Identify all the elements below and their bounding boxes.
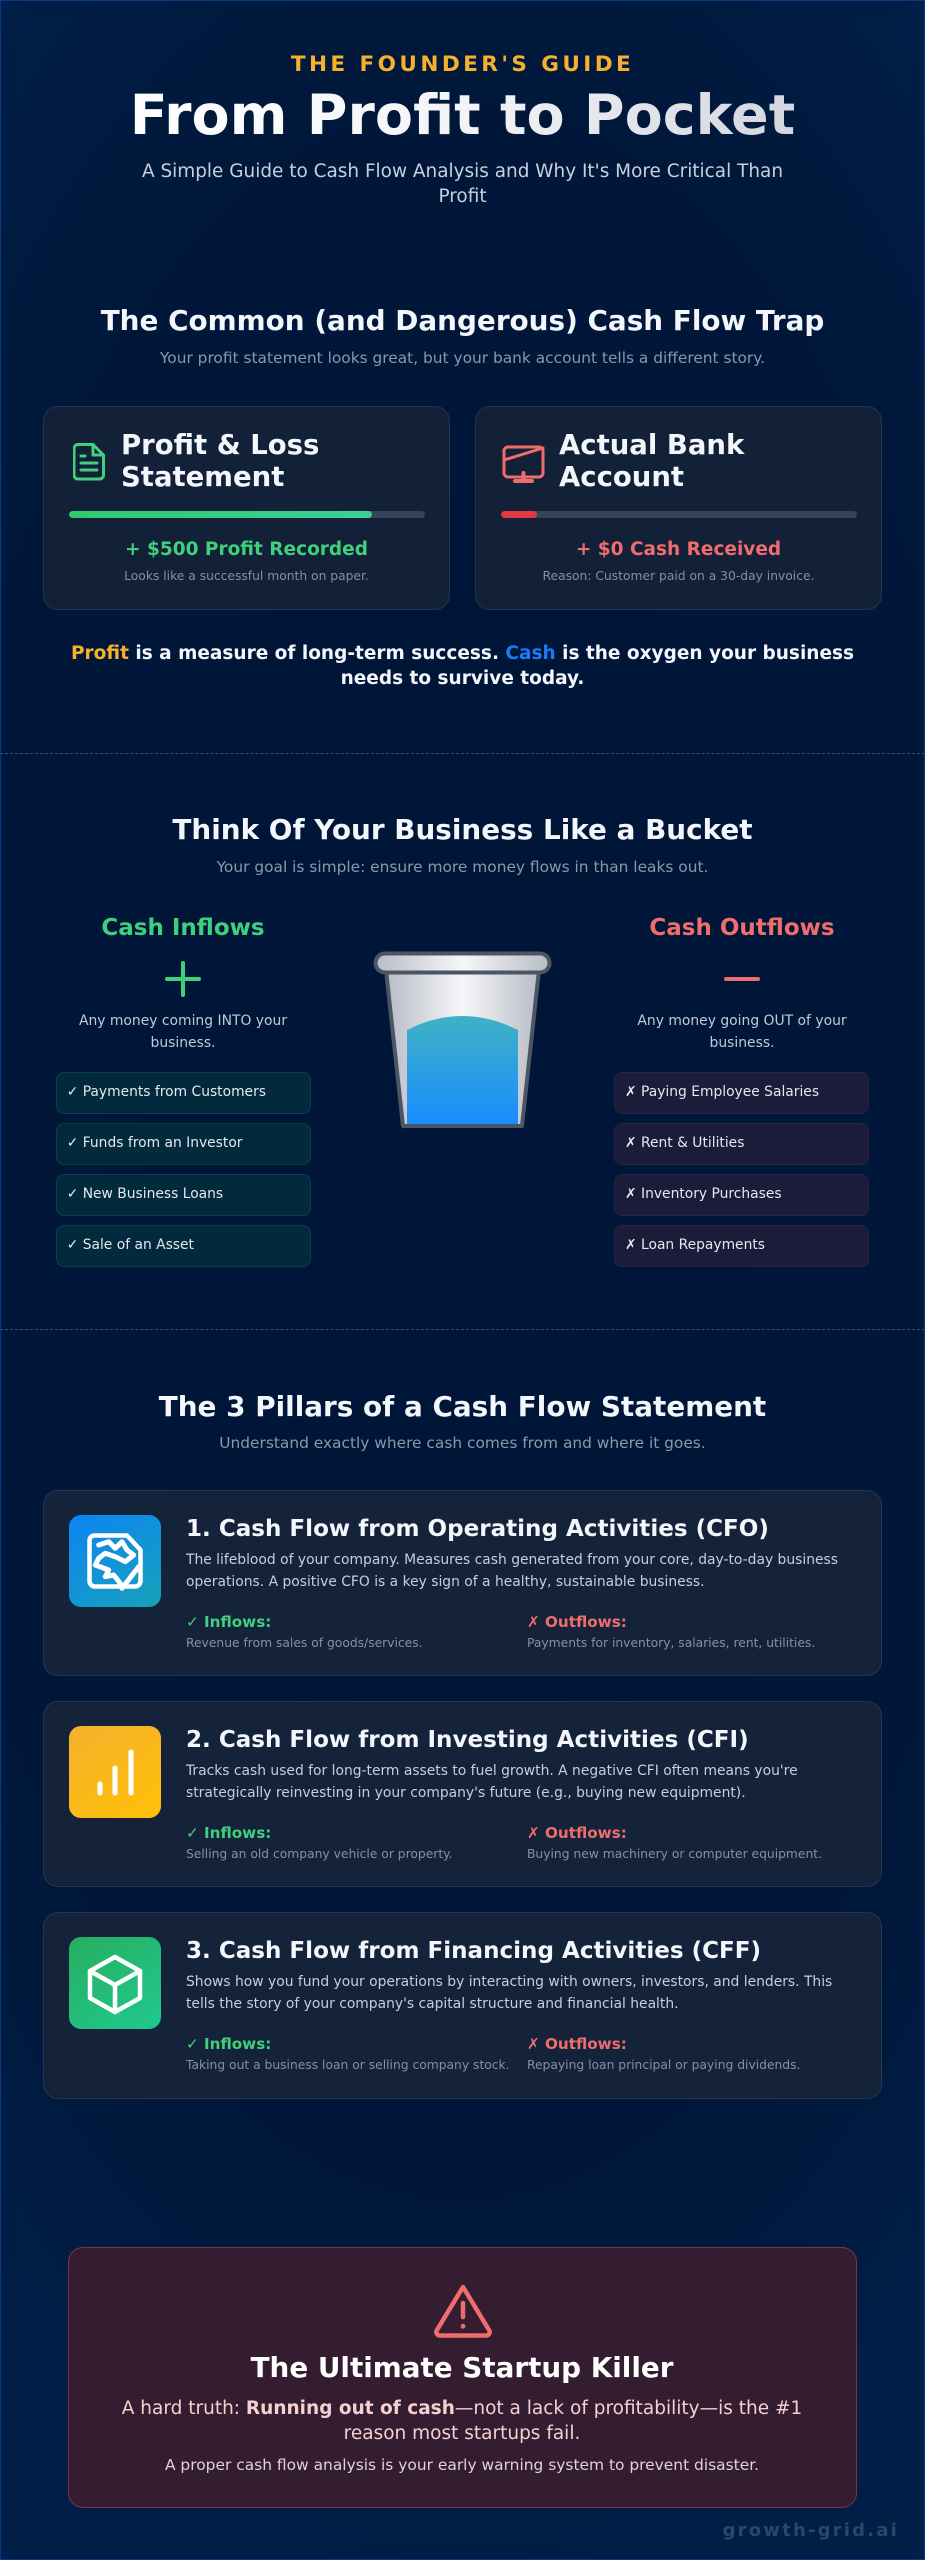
column: cash outflows — [614, 915, 869, 1267]
cash note: Reason: Customer paid on a 30-day invoice. — [543, 569, 814, 583]
icon: monitor — [502, 446, 544, 483]
card title: Actual Bank — [559, 429, 744, 461]
inflows heading: Cash Inflows — [101, 915, 265, 941]
section subheading: cash flow trap: Your profit statement looks great, but your bank account tells a different story. — [160, 349, 765, 367]
title: From Profit to Pocket — [130, 83, 795, 148]
inflows description: Any money coming INTO your — [79, 1013, 287, 1029]
inflows text: Revenue from sales of goods/services. — [186, 1636, 423, 1650]
inflows label: ✓ Inflows: — [186, 2035, 271, 2053]
subtitle: Profit — [438, 186, 487, 207]
water — [407, 1016, 518, 1124]
bucket illustration — [374, 952, 552, 1128]
section subheading: pillars: Understand exactly where cash comes from and where it goes. — [219, 1434, 706, 1452]
profit value: + $500 Profit Recorded — [125, 539, 368, 560]
card title: Account — [559, 460, 684, 492]
warning note: A proper cash flow analysis is your early warning system to prevent disaster. — [165, 2456, 759, 2474]
profit note: Looks like a successful month on paper. — [124, 569, 369, 583]
icon: financing — [69, 1937, 161, 2029]
outflow item: ✗ Rent & Utilities — [625, 1135, 744, 1151]
pillar description: operations. A positive CFO is a key sign of a healthy, sustainable business. — [186, 1574, 705, 1590]
pillar title: 1. Cash Flow from Operating Activities (CFO) — [186, 1516, 769, 1542]
pillar description: The lifeblood of your company. Measures cash generated from your core, day-to-day business — [186, 1552, 838, 1568]
callout: profit versus cash: needs to survive today. — [341, 668, 584, 689]
column: cash inflows — [56, 915, 311, 1267]
card title: Profit & Loss — [121, 429, 319, 461]
inflows description: business. — [151, 1035, 215, 1051]
pillar description: Tracks cash used for long-term assets to fuel growth. A negative CFI often means you're — [186, 1763, 798, 1779]
inflow item: ✓ Funds from an Investor — [67, 1135, 242, 1151]
outflows text: Buying new machinery or computer equipment. — [527, 1847, 822, 1861]
card title — [559, 429, 745, 492]
outflow item — [614, 1123, 869, 1165]
header — [130, 52, 795, 207]
subtitle — [142, 161, 783, 207]
inflow item: ✓ Sale of an Asset — [67, 1237, 194, 1253]
outflow item — [614, 1072, 869, 1114]
outflow item: ✗ Paying Employee Salaries — [625, 1084, 819, 1100]
pillar description — [186, 1552, 838, 1590]
panel: actual bank account — [475, 406, 882, 610]
callout: profit versus cash — [71, 643, 854, 689]
outflow item: ✗ Loan Repayments — [625, 1237, 765, 1253]
panel: ultimate startup killer — [68, 2247, 857, 2508]
inflows text: Taking out a business loan or selling company stock. — [186, 2058, 510, 2072]
pillar description: Shows how you fund your operations by interacting with owners, investors, and lenders. This — [186, 1974, 832, 1990]
inflows label: ✓ Inflows: — [186, 1824, 271, 1842]
panel: operating activities — [43, 1490, 882, 1676]
outflows description — [637, 1013, 847, 1051]
outflows heading: Cash Outflows — [649, 915, 835, 941]
pillar description — [186, 1974, 832, 2012]
outflows text: Repaying loan principal or paying dividends. — [527, 2058, 800, 2072]
outflow item: ✗ Inventory Purchases — [625, 1186, 782, 1202]
pillar title: 3. Cash Flow from Financing Activities (CFF) — [186, 1938, 761, 1964]
section heading: bucket: Think Of Your Business Like a Bucket — [172, 813, 753, 846]
watermark: growth-grid.ai — [723, 2520, 899, 2541]
section subheading: bucket: Your goal is simple: ensure more money flows in than leaks out. — [217, 858, 708, 876]
icon: document — [73, 443, 105, 480]
inflow item: ✓ Payments from Customers — [67, 1084, 266, 1100]
inflow item — [56, 1072, 311, 1114]
pillar description: tells the story of your company's capital structure and financial health. — [186, 1996, 679, 2012]
eyebrow: THE FOUNDER'S GUIDE — [291, 52, 634, 77]
outflows label: ✗ Outflows: — [527, 1824, 627, 1842]
progress bar: cash — [501, 511, 857, 518]
inflow item — [56, 1123, 311, 1165]
outflow item — [614, 1225, 869, 1267]
callout: profit versus cash: Profit is a measure of long-term success. Cash is the oxygen your business — [71, 643, 854, 664]
cash value: + $0 Cash Received — [576, 539, 781, 560]
progress bar: profit — [69, 511, 425, 518]
bucket body — [386, 970, 539, 1126]
inflow item — [56, 1225, 311, 1267]
pillar description: strategically reinvesting in your company's future (e.g., buying new equipment). — [186, 1785, 746, 1801]
icon: minus — [724, 977, 760, 981]
subtitle: A Simple Guide to Cash Flow Analysis and Why It's More Critical Than — [142, 161, 783, 182]
icon: plus — [165, 961, 201, 997]
warning message: reason most startups fail. — [344, 2423, 580, 2444]
warning heading: The Ultimate Startup Killer — [251, 2351, 673, 2384]
outflow item — [614, 1174, 869, 1216]
icon: operating — [69, 1515, 161, 1607]
outflows description: business. — [710, 1035, 774, 1051]
inflows description — [79, 1013, 288, 1051]
icon: investing — [69, 1726, 161, 1818]
panel: investing activities — [43, 1701, 882, 1887]
pillar title: 2. Cash Flow from Investing Activities (CFI) — [186, 1727, 749, 1753]
icon: warning triangle — [434, 2284, 492, 2338]
bucket rim — [376, 954, 550, 972]
panel: profit and loss statement — [43, 406, 450, 610]
card title: Statement — [121, 460, 284, 492]
warning message — [122, 2398, 802, 2444]
inflow item — [56, 1174, 311, 1216]
inflow item: ✓ New Business Loans — [67, 1186, 223, 1202]
pillar description — [186, 1763, 798, 1801]
section heading: cash flow trap: The Common (and Dangerous) Cash Flow Trap — [101, 304, 824, 337]
card title — [121, 429, 319, 492]
inflows text: Selling an old company vehicle or property. — [186, 1847, 453, 1861]
outflows label: ✗ Outflows: — [527, 1613, 627, 1631]
outflows description: Any money going OUT of your — [637, 1013, 847, 1029]
section heading: pillars: The 3 Pillars of a Cash Flow Statement — [159, 1390, 766, 1423]
outflows label: ✗ Outflows: — [527, 2035, 627, 2053]
inflows label: ✓ Inflows: — [186, 1613, 271, 1631]
warning message: A hard truth: Running out of cash—not a lack of profitability—is the #1 — [122, 2398, 802, 2419]
outflows text: Payments for inventory, salaries, rent, utilities. — [527, 1636, 815, 1650]
panel: financing activities — [43, 1912, 882, 2099]
